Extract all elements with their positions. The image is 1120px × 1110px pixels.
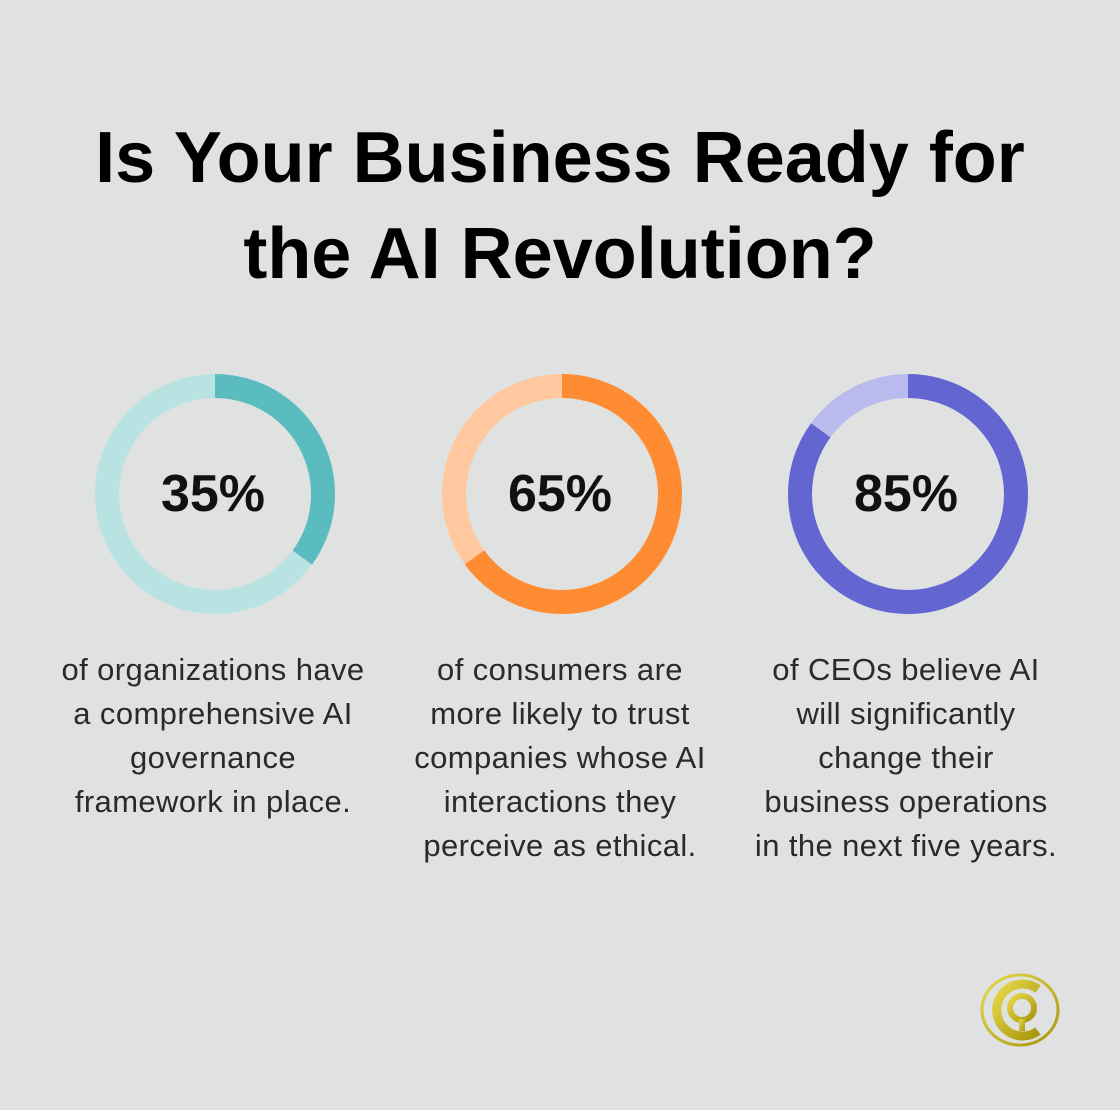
panel: stat 65% [414, 374, 706, 863]
donut chart: 65% [442, 374, 682, 614]
description: interactions they [444, 784, 676, 819]
title: Is Your Business Ready for [95, 118, 1025, 198]
description [414, 652, 706, 863]
description: will significantly [796, 696, 1016, 731]
donut chart: 35% [95, 374, 335, 614]
description: perceive as ethical. [423, 828, 697, 863]
description: framework in place. [75, 784, 351, 819]
description: a comprehensive AI [73, 696, 353, 731]
panel: stat 85% [755, 374, 1057, 863]
description: of consumers are [437, 652, 683, 687]
description: companies whose AI [414, 740, 706, 775]
description: of CEOs believe AI [772, 652, 1040, 687]
number: 85%: 85% [854, 465, 958, 523]
description [755, 652, 1057, 863]
title: the AI Revolution? [243, 214, 877, 294]
description: more likely to trust [430, 696, 690, 731]
number: 65%: 65% [508, 465, 612, 523]
icon: logo [980, 974, 1060, 1046]
number: 35%: 35% [161, 465, 265, 523]
panel: stat 35% [61, 374, 365, 819]
description: change their [818, 740, 994, 775]
description: of organizations have [61, 652, 365, 687]
description: governance [130, 740, 296, 775]
description [61, 652, 365, 819]
description: business operations [764, 784, 1048, 819]
title [95, 118, 1025, 294]
donut chart: 85% [788, 374, 1028, 614]
description: in the next five years. [755, 828, 1057, 863]
